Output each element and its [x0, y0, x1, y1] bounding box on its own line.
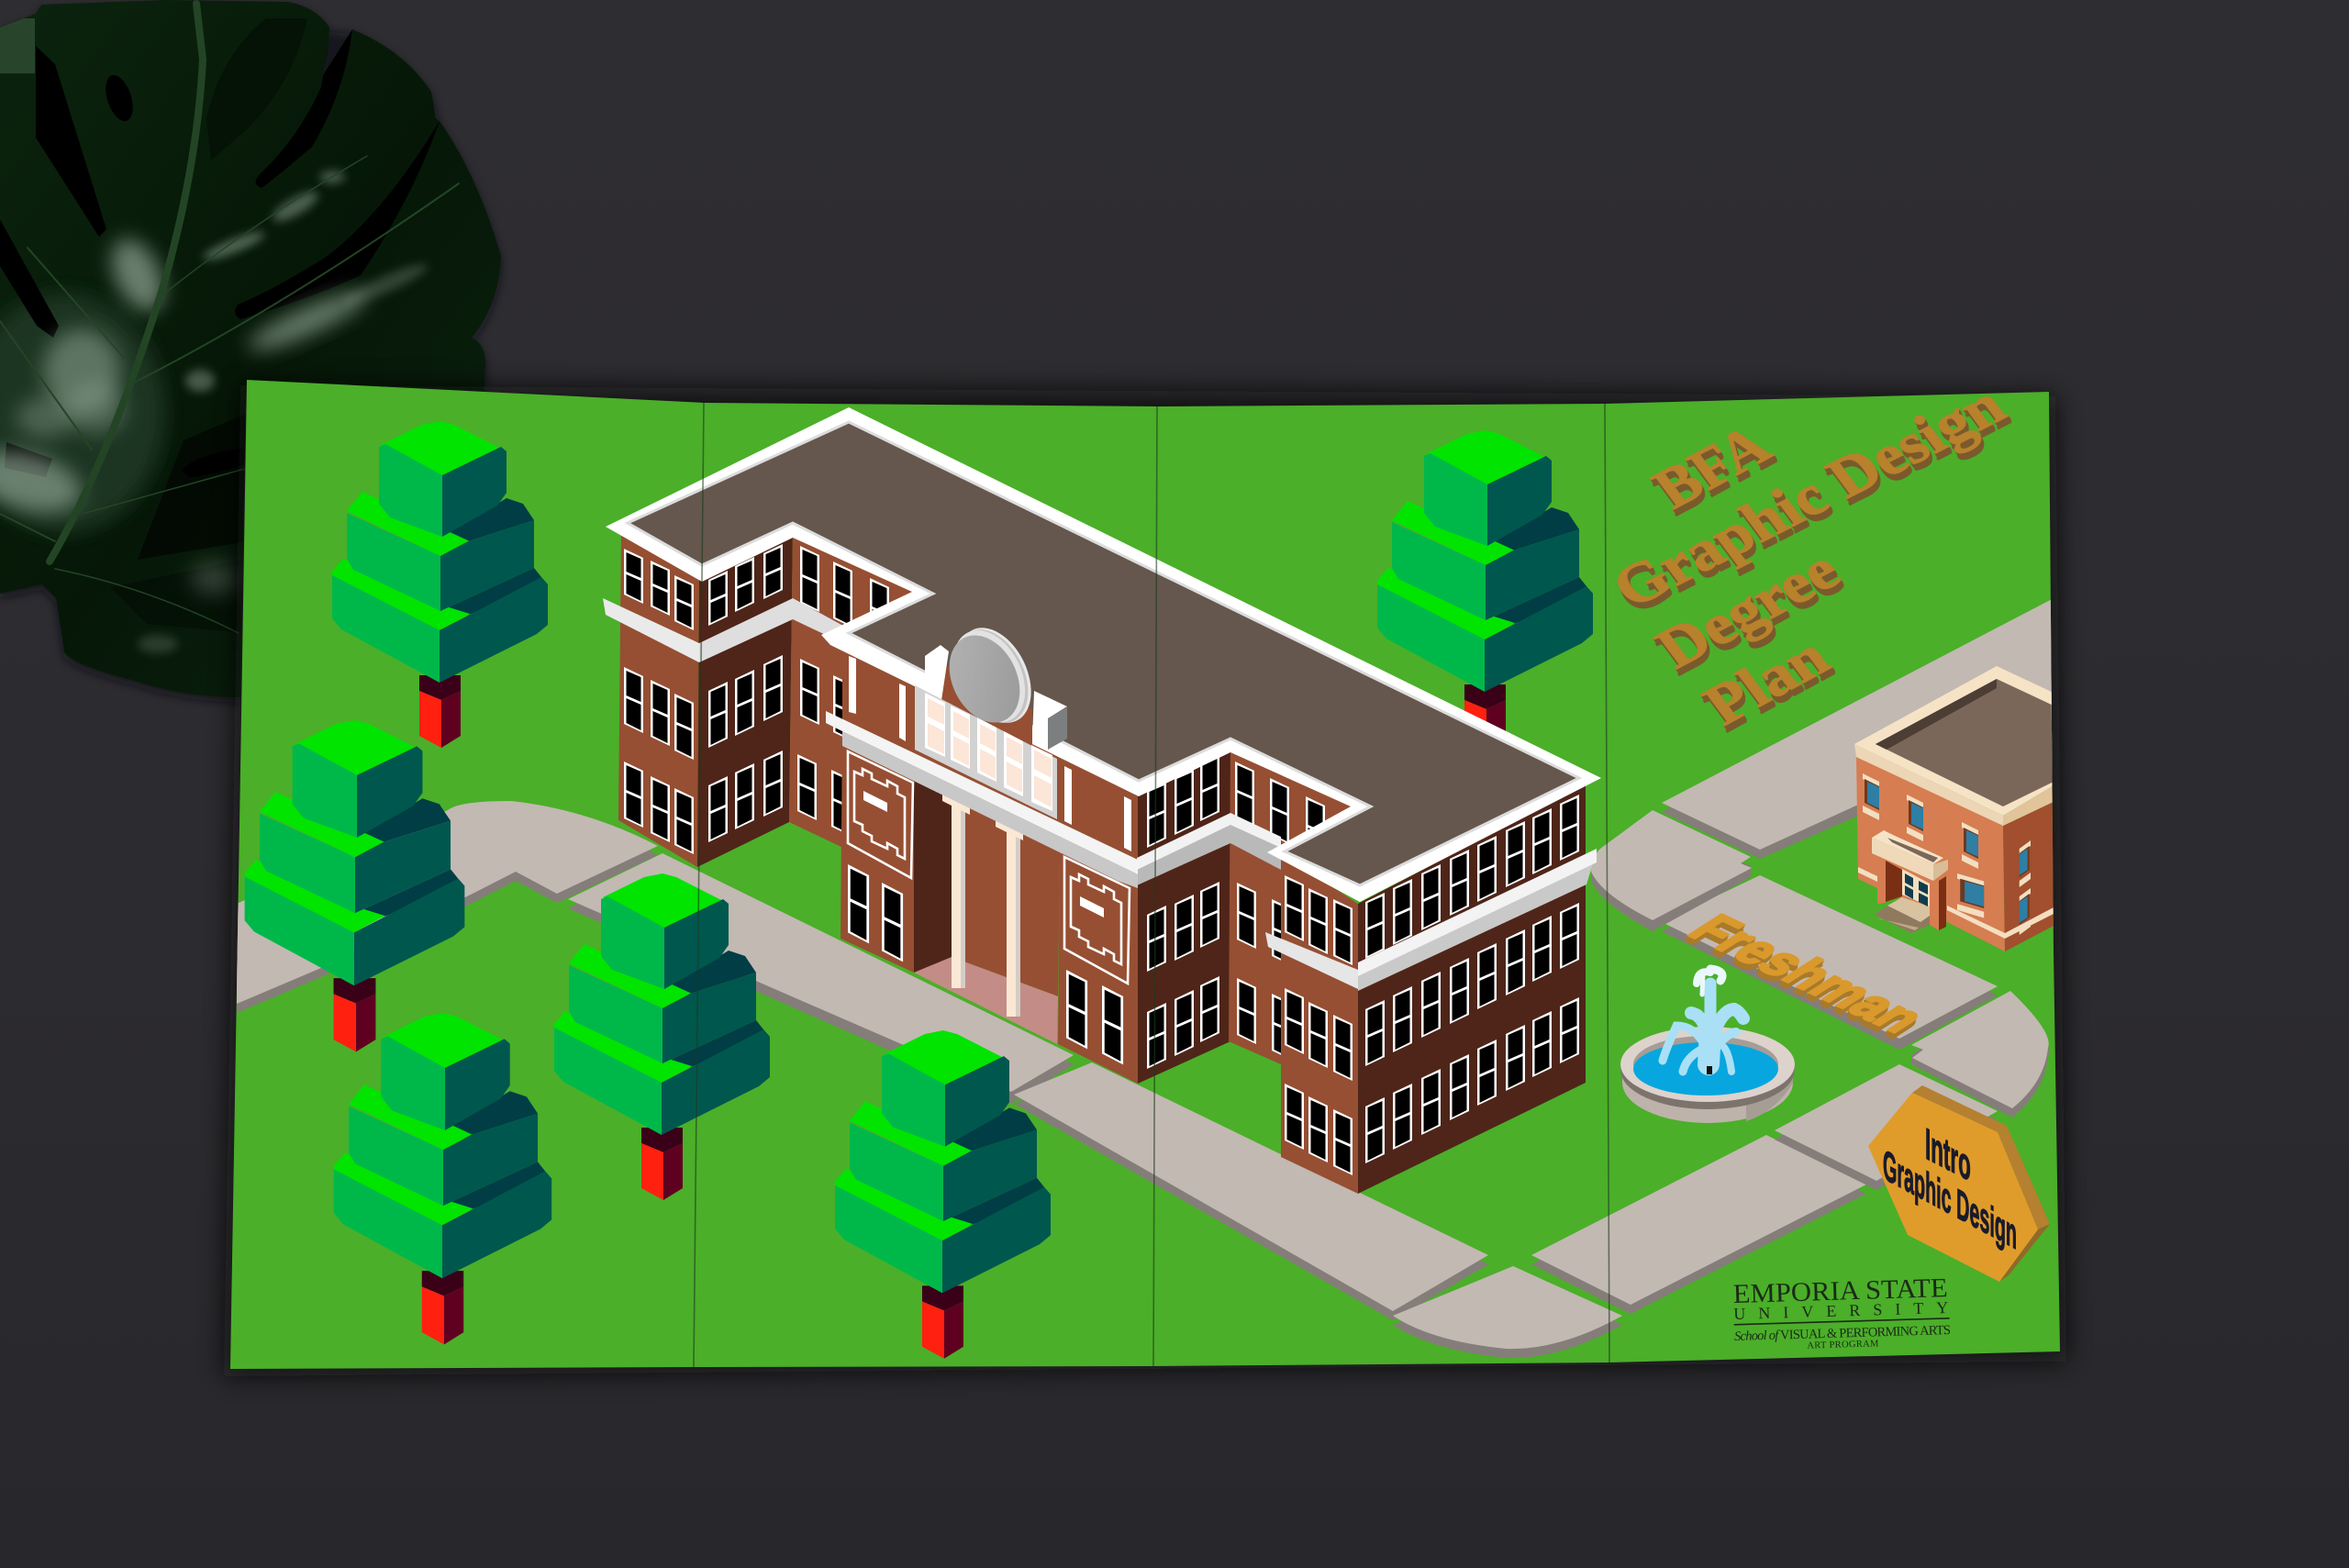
title line: BFA: BFA: [1642, 413, 1783, 521]
leaf slits: [0, 18, 440, 633]
tree: behind building: [1377, 430, 1593, 757]
sidewalk: segment behind hexagon: [1775, 1064, 1998, 1190]
title line: Plan: Plan: [1691, 623, 1841, 738]
roof trim: [606, 407, 1601, 902]
belt ledges: [603, 598, 1597, 991]
cornice: [826, 711, 1138, 888]
sidewalk: lower right diagonal: [1531, 1135, 1866, 1314]
ornamental panels: [848, 751, 1130, 984]
Emporia State University logo: [1732, 1273, 1952, 1353]
fountain nozzle: [1707, 1066, 1712, 1074]
Emporia State University logo: ART PROGRAM: [1807, 1339, 1879, 1351]
tree: centre front left: [245, 720, 464, 1051]
main campus building: [603, 407, 1601, 1194]
fold lines: [694, 403, 1609, 1367]
Emporia State University logo: EMPORIA STATE: [1732, 1273, 1948, 1309]
pier windows: [848, 864, 1123, 1064]
recessed wall and right wing: [1138, 740, 1586, 1194]
sidewalk: upper right road: [1662, 597, 2055, 859]
title: BFA Graphic Design Degree Plan: [1599, 373, 2018, 738]
porch: [1872, 830, 1948, 933]
round medallion: [936, 616, 1046, 735]
building windows: [1863, 773, 2031, 935]
Emporia State University logo: School of VISUAL & PERFORMING ARTS: [1734, 1323, 1951, 1344]
tree: front centre: [835, 1030, 1051, 1359]
base stripes: [1858, 867, 2055, 939]
sidewalk: lower diagonal: [1014, 1062, 1488, 1320]
right wing windows: [1285, 795, 1579, 1175]
monstera leaf: [0, 0, 514, 716]
Freshman label: Freshman: [1675, 906, 1940, 1040]
sidewalk: entry walk: [568, 853, 1074, 1104]
Emporia State University logo: UNIVERSITY: [1733, 1298, 1949, 1323]
marker text: Graphic Design: [1883, 1140, 2017, 1259]
leaf highlights: [0, 18, 430, 653]
infographic mockup scene: [0, 0, 2077, 1387]
parapet panels: [849, 656, 1131, 851]
sidewalk: bottom curve: [1393, 1266, 1622, 1358]
sidewalk: Freshman slab: [1662, 875, 1998, 1050]
sidewalk: left curve by fountain: [1591, 810, 1752, 931]
tree: lower left: [334, 1013, 551, 1344]
title line: Graphic Design: Graphic Design: [1599, 373, 2018, 620]
grass sheet: [230, 380, 2060, 1369]
fountain: [1620, 969, 1795, 1123]
brick walls: [618, 528, 927, 867]
fountain water jets: [1663, 969, 1743, 1072]
paper shadow: [224, 385, 2066, 1376]
portico: [841, 642, 1139, 1084]
tree: centre: [554, 873, 770, 1200]
roof: [628, 422, 1579, 885]
sidewalk: upper left curve: [237, 801, 658, 1013]
tower windows: [624, 544, 889, 854]
small freshman building: [1854, 666, 2055, 951]
hexagon course marker: Intro Graphic Design: [1868, 1085, 2050, 1282]
roof: [1854, 666, 2055, 816]
folded campus map poster: [230, 373, 2060, 1369]
tree: upper left: [332, 421, 548, 748]
leaf veins: [0, 4, 459, 633]
marker text: Intro: [1925, 1118, 1971, 1192]
sidewalk: right curve: [1911, 991, 2049, 1118]
title line: Degree: Degree: [1643, 538, 1852, 681]
central sign block: [915, 645, 1067, 819]
